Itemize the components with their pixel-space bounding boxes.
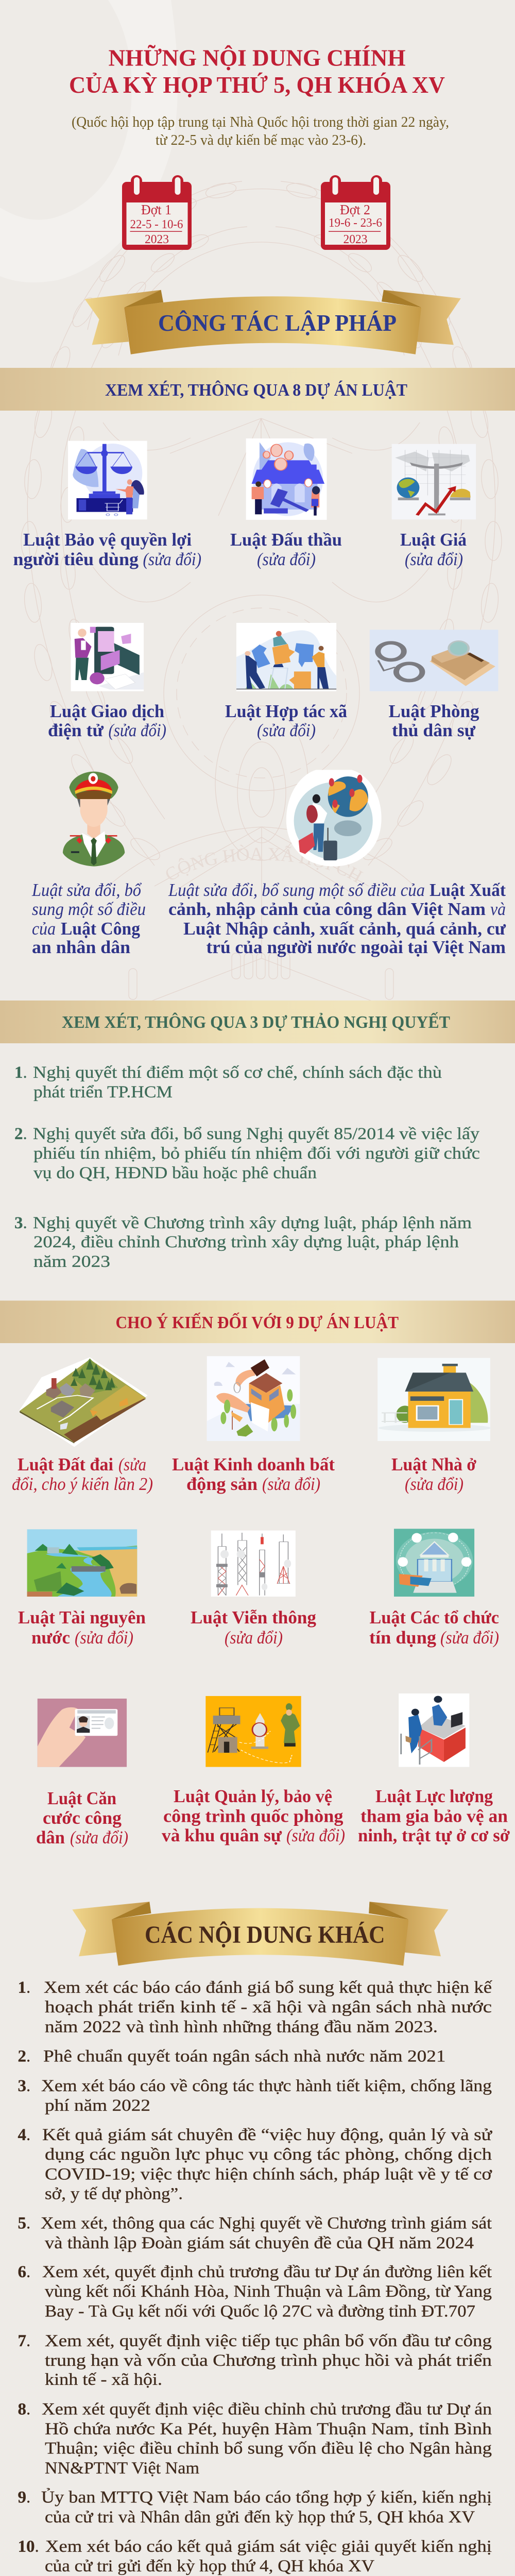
- item 6: vùng kết nối Khánh Hòa, Ninh Thuận và Lâm Đồng, từ Yang: [45, 2282, 492, 2301]
- calendar: đợt 2: [321, 175, 390, 250]
- caption: luật xuất nhập cảnh: Luật Nhập cảnh, xuất cảnh, quá cảnh, cư: [183, 919, 506, 939]
- caption: luật viễn thông: (sửa đổi): [225, 1628, 283, 1648]
- item 5: Xem xét, thông qua các Nghị quyết về Chương trình giám sát: [41, 2214, 492, 2233]
- item 4: COVID-19; việc thực hiện chính sách, pháp luật về y tế cơ: [45, 2165, 492, 2183]
- icon: land farm: [19, 1357, 148, 1447]
- list: 3 nghị quyết: 1: [14, 1063, 23, 1082]
- item 6: Xem xét, quyết định chủ trương đầu tư Dự án đường liên kết: [42, 2263, 492, 2281]
- calendar: đợt 1: 2023: [145, 233, 169, 246]
- icon: puzzle teamwork: [236, 623, 336, 691]
- item 1: hoạch phát triển kinh tế - xã hội và ngân sách nhà nước: [45, 1998, 492, 2016]
- list: 3 nghị quyết: phát triển TP.HCM: [33, 1083, 173, 1101]
- calendar: đợt 1: [122, 175, 192, 250]
- section band: 3 dự thảo nghị quyết: [0, 1001, 515, 1043]
- title: CỦA KỲ HỌP THỨ 5, QH KHÓA XV: [69, 72, 445, 98]
- item 1: .: [26, 1978, 30, 1997]
- title: NHỮNG NỘI DUNG CHÍNH: [108, 44, 406, 71]
- item 7: 7: [18, 2332, 26, 2350]
- item 7: .: [26, 2332, 30, 2350]
- caption: luật căn cước công dân: dân: [36, 1827, 65, 1848]
- caption: luật phòng thủ dân sự: thủ dân sự: [392, 720, 476, 740]
- caption: luật quản lý, bảo vệ công trình quốc phòng: và khu quân sự: [162, 1825, 282, 1845]
- item 9: Ủy ban MTTQ Việt Nam báo cáo tổng hợp ý kiến, kiến nghị: [41, 2488, 492, 2507]
- subtitle: [72, 114, 449, 148]
- list: 3 nghị quyết: vụ do QH, HĐND bầu hoặc phê chuẩn: [33, 1164, 317, 1182]
- icon: police officer: [63, 772, 125, 867]
- item 4: dụng các nguồn lực phục vụ công tác phòng, chống dịch: [45, 2145, 492, 2164]
- section band: 3 dự thảo nghị quyết: XEM XÉT, THÔNG QUA 3 DỰ THẢO NGHỊ QUYẾT: [62, 1012, 450, 1032]
- item 8: 8: [18, 2400, 26, 2418]
- item 5: và thành lập Đoàn giám sát chuyên đề của QH năm 2024: [45, 2234, 474, 2252]
- item 7: kinh tế - xã hội.: [45, 2370, 162, 2389]
- item 10: Xem xét báo cáo kết quả giám sát việc giải quyết kiến nghị: [45, 2537, 492, 2556]
- item 1: năm 2022 và tình hình những tháng đầu năm 2023.: [45, 2018, 438, 2036]
- caption: luật nhà ở: (sửa đổi): [405, 1474, 464, 1494]
- calendar: đợt 1: 22-5 - 10-6: [130, 218, 183, 231]
- list: 3 nghị quyết: Nghị quyết thí điểm một số cơ chế, chính sách đặc thù: [33, 1063, 442, 1082]
- caption: luật đất đai: Luật Đất đai: [18, 1454, 113, 1475]
- caption: luật xuất nhập cảnh: Luật sửa đổi, bổ sung một số điều của: [168, 880, 425, 900]
- caption: luật kinh doanh bất động sản: động sản: [186, 1474, 258, 1494]
- ribbon: các nội dung khác: CÁC NỘI DUNG KHÁC: [145, 1921, 385, 1948]
- item 3: .: [26, 2077, 30, 2095]
- caption: luật giá: (sửa đổi): [405, 549, 463, 569]
- caption: luật viễn thông: Luật Viễn thông: [191, 1607, 316, 1628]
- item 10: của cử tri gửi đến kỳ họp thứ 4, QH khóa XV: [45, 2557, 374, 2575]
- item 1: Xem xét các báo cáo đánh giá bổ sung kết quả thực hiện kế: [44, 1978, 492, 1997]
- caption: luật hợp tác xã: Luật Hợp tác xã: [225, 701, 347, 721]
- caption: luật quản lý, bảo vệ công trình quốc phòng: Luật Quản lý, bảo vệ: [174, 1786, 332, 1806]
- item 9: 9: [18, 2488, 26, 2507]
- item 4: 4: [18, 2126, 26, 2144]
- icon: citizen id card: [38, 1699, 127, 1767]
- section band: 8 dự án luật: [0, 368, 515, 411]
- icon: traveler and globe: [286, 770, 382, 867]
- item 3: phí năm 2022: [45, 2096, 150, 2115]
- caption: luật công an nhân dân: sung một số điều: [32, 899, 146, 919]
- list: 3 nghị quyết: phiếu tín nhiệm, bỏ phiếu tín nhiệm đối với người giữ chức: [33, 1144, 480, 1163]
- icon: water resources landscape: [27, 1529, 137, 1597]
- subtitle: (Quốc hội họp tập trung tại Nhà Quốc hội trong thời gian 22 ngày,: [72, 114, 449, 130]
- caption: luật công an nhân dân: của: [32, 919, 56, 939]
- subtitle: từ 22-5 và dự kiến bế mạc vào 23-6).: [156, 132, 366, 148]
- icon: price scales with globe: [392, 444, 476, 519]
- ribbon: công tác lập pháp: [85, 290, 461, 354]
- item 4: .: [26, 2126, 30, 2144]
- ribbon: công tác lập pháp: CÔNG TÁC LẬP PHÁP: [158, 310, 397, 336]
- caption: luật quản lý, bảo vệ công trình quốc phòng: công trình quốc phòng: [163, 1806, 344, 1826]
- item 4: Kết quả giám sát chuyên đề “việc huy động, quản lý và sử: [42, 2126, 492, 2144]
- caption: luật kinh doanh bất động sản: Luật Kinh doanh bất: [172, 1454, 335, 1475]
- icon: military works: [205, 1696, 301, 1767]
- background crescent: [0, 0, 178, 282]
- icon: e-transaction wallet: [71, 623, 144, 691]
- icon: security forces: [399, 1693, 469, 1767]
- caption: luật bảo vệ quyền lợi người tiêu dùng: (sửa đổi): [143, 549, 201, 569]
- calendar: đợt 1: Đợt 1: [141, 202, 171, 217]
- list: 3 nghị quyết: Nghị quyết sửa đổi, bổ sung Nghị quyết 85/2014 về việc lấy: [33, 1125, 480, 1143]
- item 8: Xem xét quyết định việc điều chỉnh chủ trương đầu tư Dự án: [42, 2400, 492, 2418]
- section band: 9 dự án luật: CHO Ý KIẾN ĐỐI VỚI 9 DỰ ÁN LUẬT: [115, 1312, 399, 1332]
- icon: credit institutions: [394, 1529, 474, 1597]
- item 7: trung hạn và vốn của Chương trình phục hồi và phát triển: [45, 2351, 492, 2370]
- item 7: Xem xét, quyết định việc tiếp tục phân bổ vốn đầu tư công: [45, 2332, 492, 2350]
- calendar: đợt 2: Đợt 2: [340, 202, 370, 217]
- caption: luật kinh doanh bất động sản: (sửa đổi): [262, 1474, 320, 1494]
- caption: luật xuất nhập cảnh: và: [490, 899, 506, 919]
- caption: luật giao dịch điện tử: Luật Giao dịch: [50, 701, 164, 721]
- list: 3 nghị quyết: .: [23, 1063, 27, 1082]
- caption: luật bảo vệ quyền lợi người tiêu dùng: Luật Bảo vệ quyền lợi: [23, 530, 192, 550]
- list: các nội dung khác: [18, 1978, 492, 2576]
- list: 3 nghị quyết: Nghị quyết về Chương trình xây dựng luật, pháp lệnh năm: [33, 1214, 472, 1232]
- caption: luật căn cước công dân: Luật Căn: [47, 1788, 116, 1808]
- item 10: 10: [18, 2537, 35, 2556]
- list: 3 nghị quyết: .: [23, 1125, 27, 1143]
- list: 3 nghị quyết: 3: [14, 1214, 23, 1232]
- list: 3 nghị quyết: [14, 1063, 480, 1271]
- item 5: .: [26, 2214, 30, 2233]
- caption: luật giá: Luật Giá: [400, 530, 467, 550]
- item 6: .: [26, 2263, 30, 2281]
- icon: handcuffs and case file: [370, 630, 498, 691]
- caption: luật đấu thầu: (sửa đổi): [257, 549, 316, 569]
- item 8: Hồ chứa nước Ka Pét, huyện Hàm Thuận Nam, tỉnh Bình: [45, 2420, 492, 2438]
- item 8: NN&PTNT Việt Nam: [45, 2459, 199, 2478]
- item 8: .: [26, 2400, 30, 2418]
- caption: luật các tổ chức tín dụng: tín dụng: [369, 1628, 437, 1648]
- icon: real estate: [207, 1356, 300, 1441]
- list: 3 nghị quyết: 2: [14, 1125, 23, 1143]
- caption: luật lực lượng tham gia bảo vệ an ninh: ninh, trật tự ở cơ sở: [358, 1825, 510, 1845]
- caption: luật giao dịch điện tử: điện tử: [48, 720, 104, 740]
- caption: luật nhà ở: Luật Nhà ở: [391, 1454, 477, 1475]
- caption: luật hợp tác xã: (sửa đổi): [257, 720, 316, 740]
- caption: luật đất đai: (sửa: [118, 1454, 146, 1475]
- caption: luật quản lý, bảo vệ công trình quốc phòng: (sửa đổi): [286, 1825, 345, 1845]
- list: 3 nghị quyết: 2024, điều chỉnh Chương trình xây dựng luật, pháp lệnh: [33, 1233, 459, 1251]
- icon: scales and consumers: [68, 441, 147, 519]
- caption: luật tài nguyên nước: Luật Tài nguyên: [18, 1607, 146, 1628]
- caption: luật xuất nhập cảnh: trú của người nước ngoài tại Việt Nam: [206, 937, 506, 957]
- caption: luật lực lượng tham gia bảo vệ an ninh: Luật Lực lượng: [375, 1786, 493, 1806]
- item 2: 2: [18, 2047, 26, 2065]
- icon: auction house: [246, 438, 327, 520]
- caption: luật bảo vệ quyền lợi người tiêu dùng: người tiêu dùng: [13, 549, 139, 569]
- icon: telecom towers: [211, 1531, 296, 1597]
- caption: luật xuất nhập cảnh: cảnh, nhập cảnh của công dân Việt Nam: [168, 899, 486, 919]
- caption: luật tài nguyên nước: nước: [31, 1628, 70, 1648]
- item 5: 5: [18, 2214, 26, 2233]
- caption: luật các tổ chức tín dụng: Luật Các tổ chức: [370, 1607, 499, 1628]
- item 2: Phê chuẩn quyết toán ngân sách nhà nước năm 2021: [43, 2047, 445, 2065]
- item 6: 6: [18, 2263, 26, 2281]
- item 10: .: [35, 2537, 39, 2556]
- caption: luật các tổ chức tín dụng: (sửa đổi): [440, 1628, 499, 1648]
- background: national emblem line art: [21, 175, 502, 1001]
- caption: luật xuất nhập cảnh: Luật Xuất: [430, 880, 506, 900]
- item 4: sở, y tế dự phòng”.: [45, 2185, 183, 2204]
- item 2: .: [26, 2047, 30, 2065]
- caption: luật đấu thầu: Luật Đấu thầu: [230, 530, 342, 550]
- ribbon: các nội dung khác: [72, 1902, 449, 1965]
- item 6: Bay - Tà Gụ kết nối với Quốc lộ 27C và đường tỉnh ĐT.707: [45, 2302, 475, 2320]
- title: [69, 44, 445, 98]
- caption: luật đất đai: đổi, cho ý kiến lần 2): [12, 1474, 153, 1494]
- section band: 9 dự án luật: [0, 1300, 515, 1343]
- list: 3 nghị quyết: năm 2023: [33, 1252, 110, 1271]
- item 9: của cử tri và Nhân dân gửi đến kỳ họp thứ 5, QH khóa XV: [45, 2508, 475, 2527]
- caption: luật công an nhân dân: Luật Công: [61, 919, 140, 939]
- caption: luật công an nhân dân: Luật sửa đổi, bổ: [31, 880, 142, 900]
- item 3: Xem xét báo cáo về công tác thực hành tiết kiệm, chống lãng: [41, 2077, 492, 2095]
- item 3: 3: [18, 2077, 26, 2095]
- calendar: đợt 2: 19-6 - 23-6: [329, 216, 382, 230]
- section band: 8 dự án luật: XEM XÉT, THÔNG QUA 8 DỰ ÁN LUẬT: [105, 380, 407, 400]
- caption: luật căn cước công dân: (sửa đổi): [70, 1827, 128, 1848]
- caption: luật căn cước công dân: cước công: [43, 1808, 122, 1828]
- caption: luật công an nhân dân: an nhân dân: [32, 937, 130, 957]
- calendar: đợt 2: 2023: [343, 233, 368, 246]
- icon: yellow house: [377, 1358, 491, 1441]
- caption: luật giao dịch điện tử: (sửa đổi): [108, 720, 166, 740]
- item 1: 1: [18, 1978, 26, 1997]
- list: 3 nghị quyết: .: [23, 1214, 27, 1232]
- item 9: .: [26, 2488, 30, 2507]
- caption: luật phòng thủ dân sự: Luật Phòng: [388, 701, 479, 721]
- caption: luật tài nguyên nước: (sửa đổi): [75, 1628, 133, 1648]
- caption: luật lực lượng tham gia bảo vệ an ninh: tham gia bảo vệ an: [360, 1806, 508, 1826]
- item 8: Thuận; việc điều chỉnh bổ sung vốn điều lệ cho Ngân hàng: [45, 2439, 492, 2458]
